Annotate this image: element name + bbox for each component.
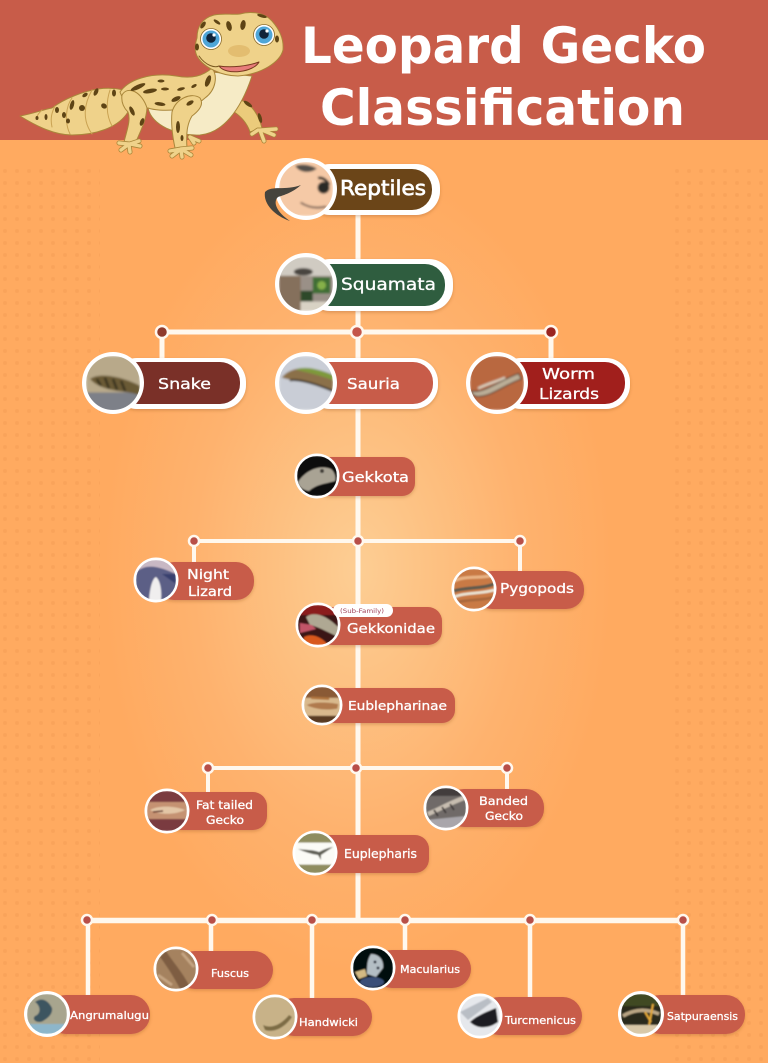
node: Night Lizard (134, 558, 254, 602)
node: Snake (82, 352, 246, 414)
body (120, 68, 215, 110)
node: Turcmenicus (458, 994, 582, 1038)
tail (20, 88, 128, 135)
node: Night Lizard: Lizard (188, 584, 232, 600)
front leg (170, 96, 202, 157)
node: Gekkota (294, 454, 415, 498)
header band (0, 0, 768, 140)
node: Euplepharis: Euplepharis (344, 847, 417, 861)
node: Pygopods (452, 566, 584, 612)
title: Leopard Gecko (301, 17, 706, 75)
node: Sauria: Sauria (347, 375, 400, 393)
node: Reptiles: Reptiles (340, 176, 426, 200)
belly (148, 72, 252, 135)
head (195, 12, 283, 76)
node: Reptiles (265, 158, 440, 221)
node: Gekkonidae: Gekkonidae (347, 621, 435, 637)
node: Fat tailed Gecko: Gecko (206, 813, 244, 827)
node: Gekkonidae (296, 602, 442, 648)
eyes (200, 24, 274, 50)
node: Fuscus (154, 946, 273, 992)
icon: cartoon leopard gecko (20, 12, 283, 157)
hind leg (119, 90, 147, 152)
node: Handwicki (252, 994, 372, 1040)
node: Snake: Snake (158, 375, 211, 393)
node: Handwicki: Handwicki (299, 1016, 358, 1029)
node: Sauria (275, 352, 438, 414)
title (301, 17, 706, 137)
node: Macularius (350, 946, 471, 990)
connector lines (87, 215, 683, 1000)
node: Banded Gecko: Banded (479, 794, 528, 808)
node: Worm Lizards (466, 352, 630, 414)
node: Eublepharinae (302, 684, 455, 726)
node: Fuscus: Fuscus (211, 968, 249, 980)
back foot and leg (231, 100, 276, 141)
node: Satpuraensis (618, 991, 745, 1037)
node: Worm Lizards: Worm (542, 365, 595, 383)
node: Night Lizard: Night (187, 567, 229, 583)
sub-family tag: (Sub-Family) (340, 607, 384, 615)
node: Squamata (275, 253, 453, 315)
connector dots (82, 326, 688, 925)
node: Banded Gecko: Gecko (485, 809, 523, 823)
node: Macularius: Macularius (400, 963, 460, 976)
node: Pygopods: Pygopods (500, 581, 574, 597)
node: Satpuraensis: Satpuraensis (667, 1010, 738, 1023)
node: Squamata: Squamata (341, 275, 436, 295)
title: Classification (320, 79, 685, 137)
node: Worm Lizards: Lizards (539, 385, 599, 403)
node: Gekkota: Gekkota (342, 470, 409, 486)
node: Angrumalugu (24, 991, 150, 1037)
node: Euplepharis (292, 830, 429, 876)
node: Fat tailed Gecko (144, 788, 267, 834)
rear toes behind front leg (190, 137, 199, 143)
node: Turcmenicus: Turcmenicus (504, 1014, 576, 1027)
node: Fat tailed Gecko: Fat tailed (196, 798, 253, 812)
node: Banded Gecko (424, 786, 544, 830)
sub-family tag (333, 604, 393, 617)
spots (36, 13, 279, 141)
nose and mouth (199, 45, 259, 72)
node: Angrumalugu: Angrumalugu (70, 1009, 149, 1022)
node: Eublepharinae: Eublepharinae (348, 698, 447, 713)
